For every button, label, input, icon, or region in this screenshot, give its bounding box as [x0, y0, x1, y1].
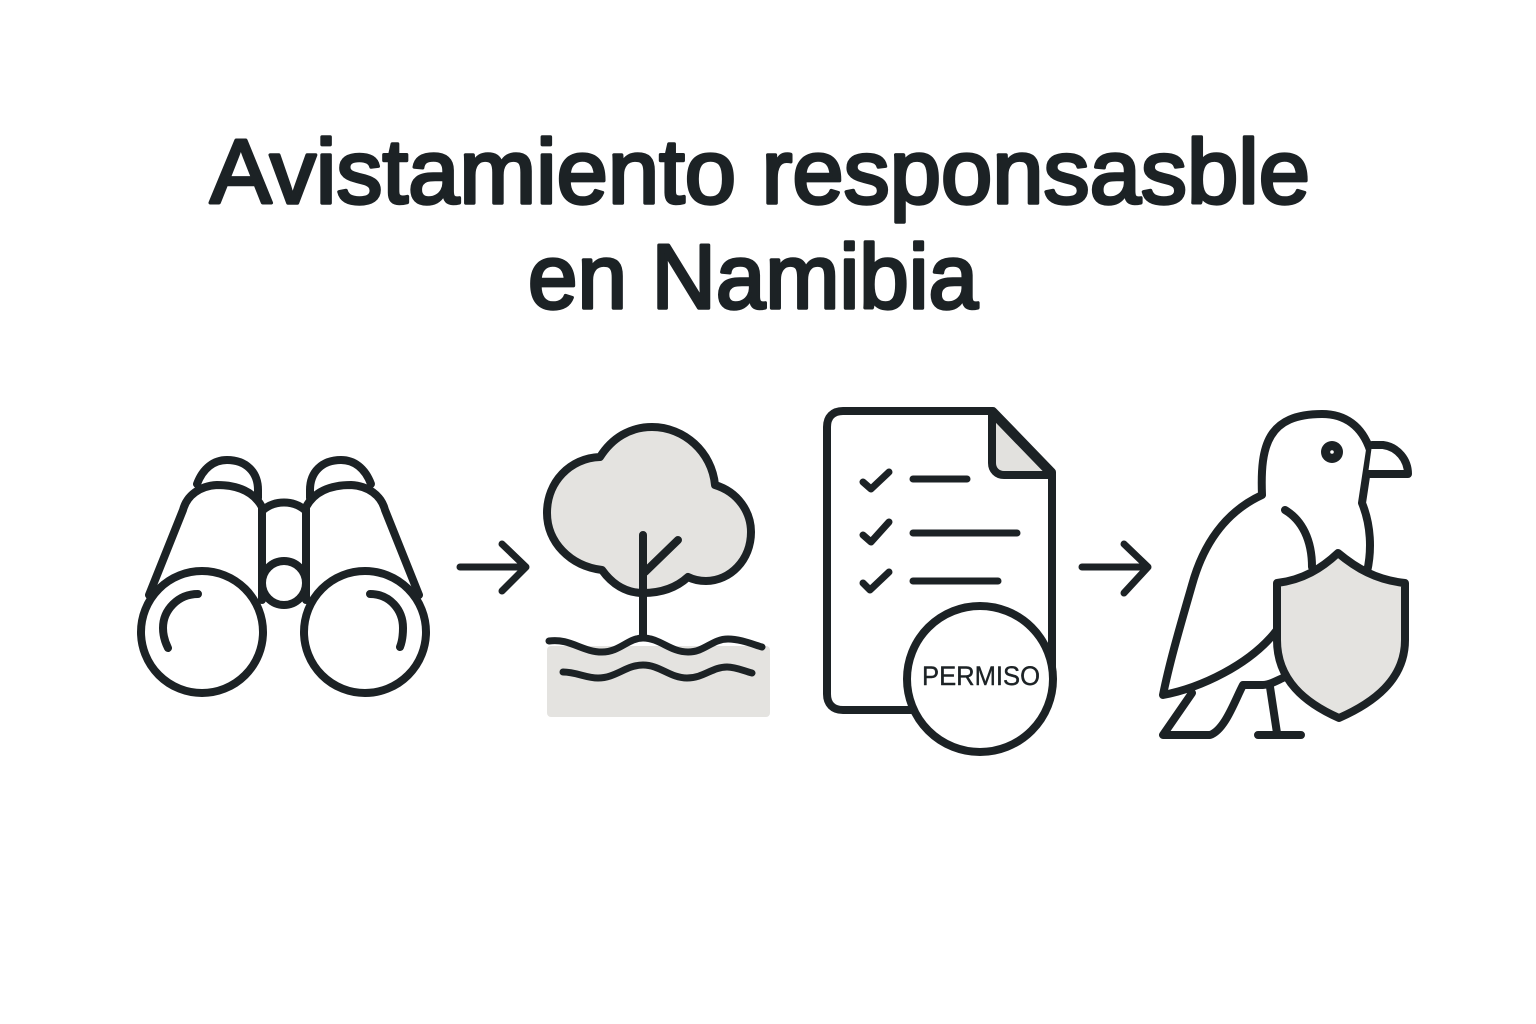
eye [1321, 441, 1343, 463]
leg [1258, 687, 1301, 735]
icon: bird with shield [1163, 414, 1408, 735]
tree crown [547, 427, 751, 593]
title: Avistamiento responsasble [210, 122, 1310, 223]
checklist [863, 472, 1017, 590]
icon: tree and water [547, 427, 770, 717]
title [210, 122, 1310, 328]
bird body [1163, 414, 1370, 735]
icon: binoculars [141, 460, 426, 693]
waves [549, 638, 762, 678]
trunk [643, 535, 678, 637]
shield [1277, 553, 1405, 718]
arrow: binoculars to habitat [460, 544, 526, 591]
icon: permit document [827, 411, 1053, 752]
ground block [547, 646, 770, 717]
folded corner [992, 413, 1052, 475]
wing [1285, 510, 1312, 567]
permit seal [907, 606, 1053, 752]
seal label: PERMISO [922, 661, 1040, 691]
sheet [827, 411, 1052, 710]
title: en Namibia [528, 227, 978, 328]
arrow: document to bird [1082, 544, 1148, 593]
beak [1368, 445, 1408, 474]
